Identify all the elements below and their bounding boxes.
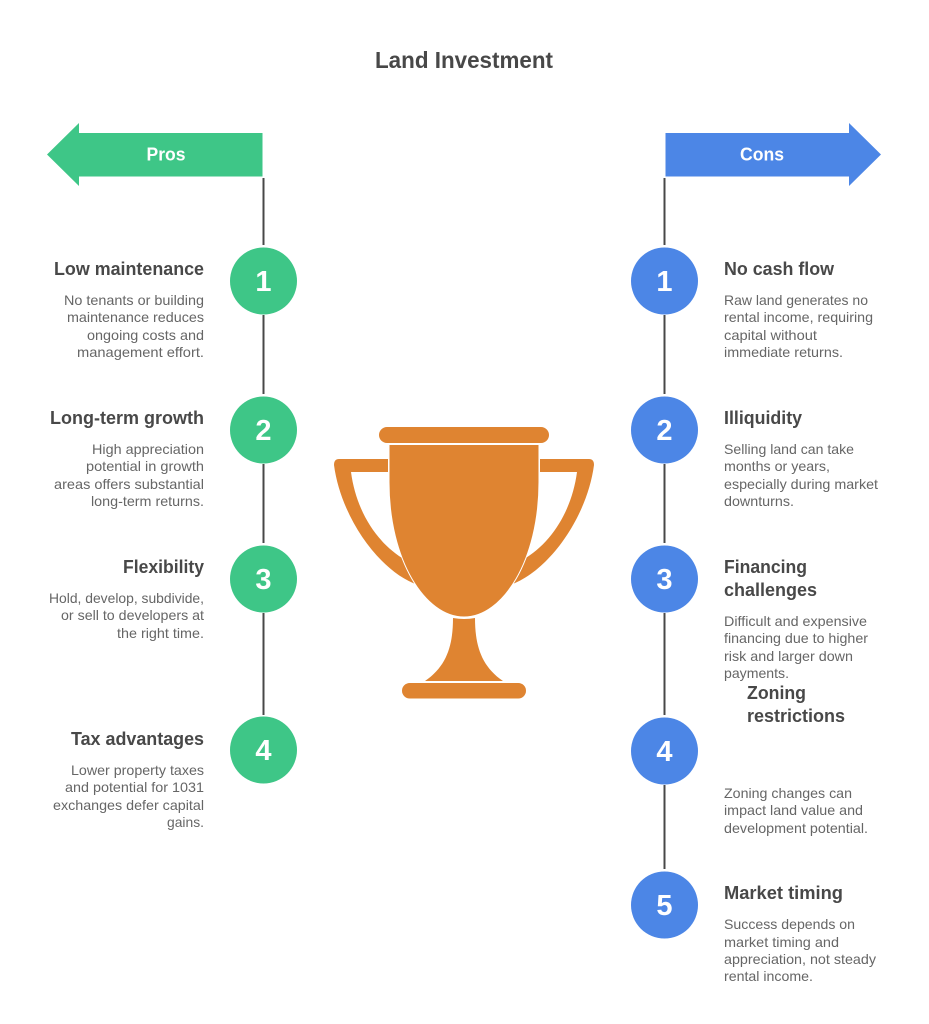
cons item 1: Raw land generates no (724, 292, 868, 308)
cons item 4: 4 (656, 736, 673, 768)
cons item 2: downturns. (724, 493, 794, 509)
cons item 5: appreciation, not steady (724, 951, 876, 967)
arrow: cons (666, 123, 881, 186)
cons item 2: months or years, (724, 458, 830, 474)
pros item 1: management effort. (77, 344, 204, 360)
pros item 2: potential in growth (86, 458, 204, 474)
cons item 1 (631, 248, 873, 360)
pros item 1: Low maintenance (54, 259, 204, 279)
cons timeline line (664, 178, 666, 869)
pros item 3: or sell to developers at (61, 607, 204, 623)
pros item 4: and potential for 1031 (65, 779, 204, 795)
pros item 4 (53, 716, 297, 830)
pros item 2 (50, 396, 297, 509)
cons item 1: 1 (656, 266, 673, 298)
arrow: pros (47, 123, 262, 186)
cons item 4: development potential. (724, 820, 868, 836)
icon: trophy (334, 427, 594, 698)
cons item 5: 5 (656, 890, 673, 922)
cons item 5: Success depends on (724, 916, 855, 932)
pros timeline line (262, 178, 264, 715)
pros item 2: High appreciation (92, 441, 204, 457)
arrow: pros: Pros (146, 144, 186, 164)
pros item 4: Lower property taxes (71, 762, 204, 778)
cons item 4: restrictions (747, 706, 845, 726)
pros item 1: No tenants or building (64, 292, 204, 308)
cons item 1: No cash flow (724, 259, 835, 279)
cons item 1: capital without (724, 327, 817, 343)
pros item 4: Tax advantages (71, 729, 204, 749)
cons item 3: Difficult and expensive (724, 613, 867, 629)
cons item 4: Zoning changes can (724, 785, 852, 801)
pros item 4: exchanges defer capital (53, 797, 204, 813)
cons item 3: 3 (656, 564, 673, 596)
cons item 3: payments. (724, 665, 789, 681)
cons item 1: immediate returns. (724, 344, 843, 360)
pros item 4: 4 (255, 735, 272, 767)
pros item 1: 1 (255, 266, 272, 298)
pros item 2: 2 (255, 415, 272, 447)
pros item 3: Flexibility (123, 557, 204, 577)
pros item 2: long-term returns. (91, 493, 204, 509)
cons item 3: challenges (724, 580, 817, 600)
cons item 2: Illiquidity (724, 408, 802, 428)
cons item 3: financing due to higher (724, 630, 868, 646)
cons item 2: Selling land can take (724, 441, 854, 457)
cons item 5 (631, 872, 876, 984)
title: Land Investment (375, 47, 553, 73)
pros item 4: gains. (167, 814, 204, 830)
pros item 3 (49, 546, 297, 641)
cons item 3: Financing (724, 557, 807, 577)
cons item 5: market timing and (724, 934, 839, 950)
pros item 1 (54, 248, 297, 360)
pros item 2: areas offers substantial (54, 476, 204, 492)
arrow: cons: Cons (740, 144, 784, 164)
pros item 3: Hold, develop, subdivide, (49, 590, 204, 606)
pros item 1: maintenance reduces (67, 309, 204, 325)
cons item 2 (631, 396, 878, 509)
pros item 3: 3 (255, 564, 272, 596)
pros item 2: Long-term growth (50, 408, 204, 428)
pros item 3: the right time. (117, 625, 204, 641)
pros item 1: ongoing costs and (87, 327, 204, 343)
cons item 5: Market timing (724, 883, 843, 903)
cons item 4: impact land value and (724, 802, 863, 818)
cons item 3: risk and larger down (724, 648, 853, 664)
cons item 1: rental income, requiring (724, 309, 873, 325)
cons item 2: especially during market (724, 476, 878, 492)
cons item 4: Zoning (747, 683, 806, 703)
cons item 3 (631, 546, 868, 681)
cons item 5: rental income. (724, 968, 813, 984)
cons item 4 (631, 683, 868, 836)
cons item 2: 2 (656, 415, 673, 447)
